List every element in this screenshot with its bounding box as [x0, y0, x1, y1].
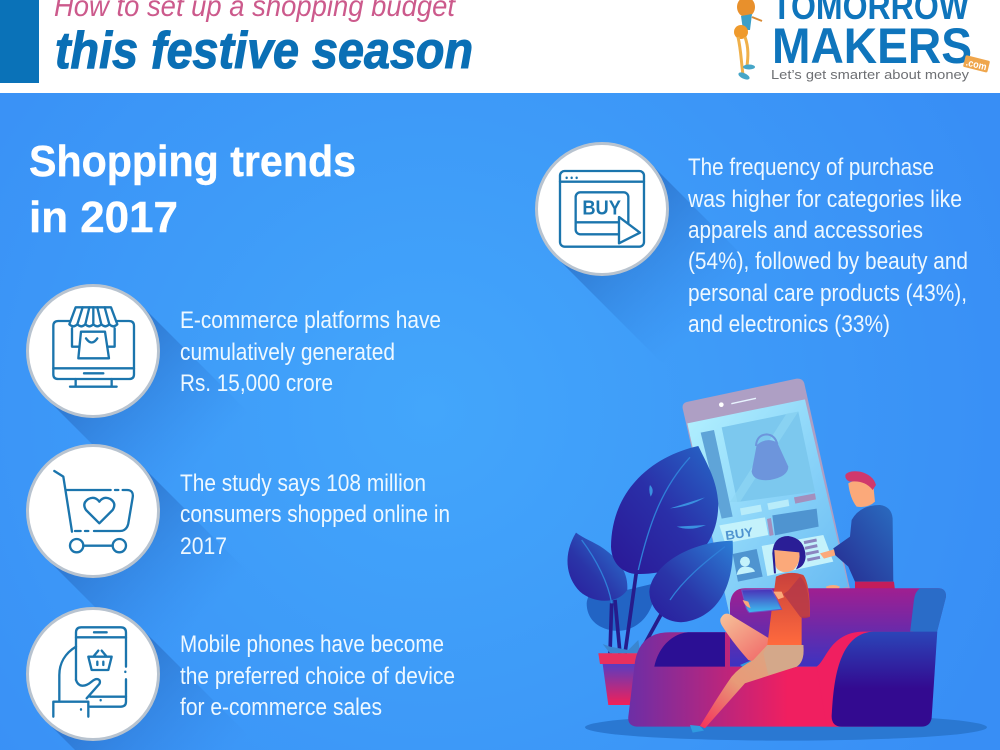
- icon circle: buy button window: [536, 144, 668, 274]
- text: mobile phones: for e-commerce sales: [180, 694, 382, 721]
- text: e-commerce revenue: cumulatively generated: [180, 339, 395, 366]
- ground shadow: [585, 714, 987, 741]
- header band: [0, 0, 1000, 93]
- icon circle: buy button window: BUY: [582, 197, 621, 219]
- text: e-commerce revenue: Rs. 15,000 crore: [180, 370, 333, 397]
- heading: Shopping trends in 2017: [29, 137, 356, 242]
- logo: Tomorrow Makers: MAKERS: [772, 18, 972, 74]
- giant smartphone: [683, 379, 852, 623]
- woman with tablet: [690, 536, 810, 733]
- text: 108 million consumers: 2017: [180, 533, 227, 560]
- text: 108 million consumers: The study says 108 million: [180, 470, 426, 497]
- text: frequency of purchase: [687, 154, 968, 338]
- text: 108 million consumers: consumers shopped online in: [180, 501, 450, 528]
- sofa: [628, 588, 946, 727]
- icon circle: shopping cart with heart: [28, 446, 158, 576]
- text: frequency of purchase: was higher for categories like: [687, 186, 962, 213]
- text: frequency of purchase: and electronics (33%): [688, 311, 890, 338]
- heading: Shopping trends in 2017: in 2017: [29, 193, 178, 242]
- heading: Shopping trends in 2017: Shopping trends: [29, 137, 356, 186]
- text: mobile phones: [180, 631, 455, 721]
- plant: [568, 446, 733, 705]
- illustration: couple shopping on sofa: [568, 379, 987, 741]
- text: e-commerce revenue: E-commerce platforms have: [180, 307, 441, 334]
- text: 108 million consumers: [180, 470, 450, 560]
- text: mobile phones: Mobile phones have become: [180, 631, 444, 658]
- icon circle: hand holding phone: [28, 608, 158, 740]
- header band: this festive season: [55, 22, 473, 80]
- giant smartphone: BUY: [724, 525, 755, 543]
- logo: Tomorrow Makers: [734, 0, 990, 82]
- man standing: [820, 471, 895, 590]
- text: frequency of purchase: apparels and accessories: [688, 217, 923, 244]
- text: frequency of purchase: The frequency of purchase: [688, 154, 934, 181]
- text: mobile phones: the preferred choice of device: [180, 663, 455, 690]
- text: e-commerce revenue: [180, 307, 441, 397]
- long shadows of circles: [46, 162, 759, 750]
- logo: Tomorrow Makers: Let’s get smarter about money: [771, 67, 970, 82]
- icon circle: online store: [28, 286, 158, 416]
- logo: Tomorrow Makers: .com: [965, 57, 988, 73]
